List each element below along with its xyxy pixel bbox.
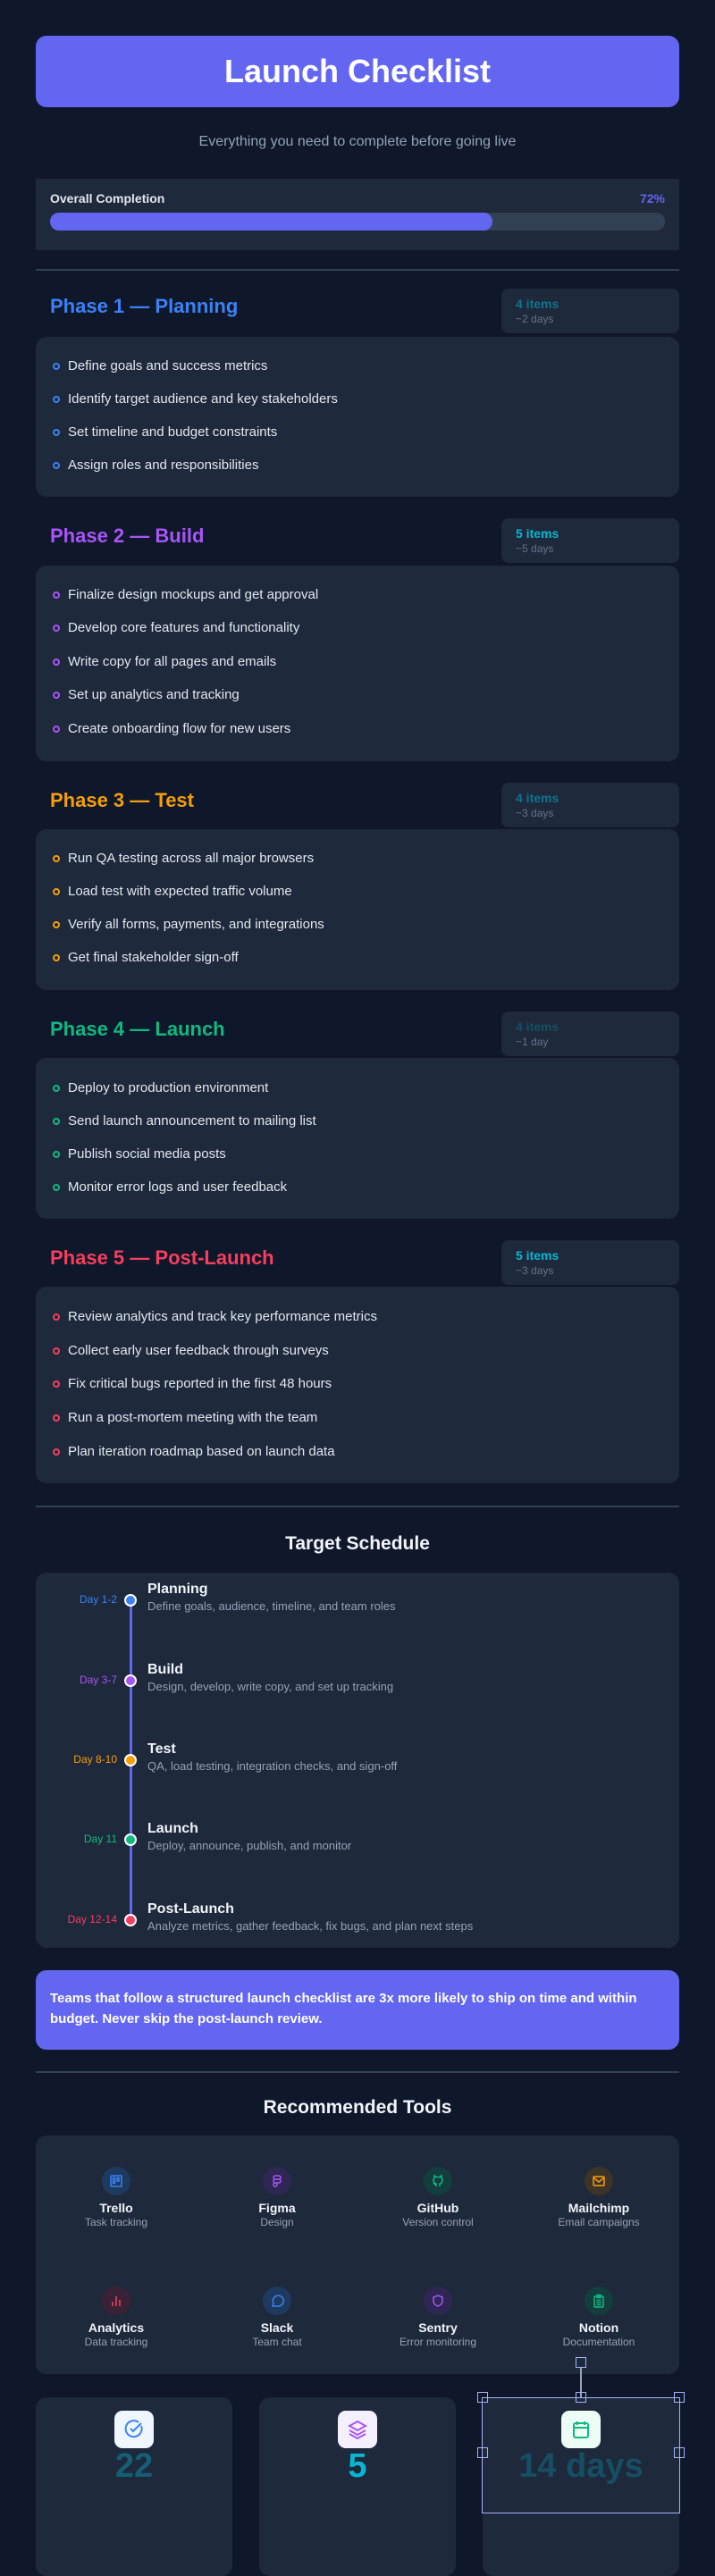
timeline: build: Day 3-7 — [80, 1674, 117, 1686]
progress value: 72% — [640, 191, 665, 206]
panel: phase 3 list — [36, 829, 679, 990]
panel: phase 2 list: Develop core features and functionality — [68, 620, 299, 635]
panel: timeline — [36, 1573, 679, 1948]
panel: phase 5 list: Run a post-mortem meeting with the team — [68, 1410, 317, 1425]
progress panel — [36, 179, 679, 250]
panel: timeline: Build — [147, 1662, 183, 1677]
tool: trello — [85, 2167, 147, 2228]
phase 5 badge: ~3 days — [516, 1264, 553, 1277]
timeline: planning: Day 1-2 — [80, 1593, 117, 1606]
tool: notion: Notion — [579, 2320, 618, 2335]
panel: phase 1 list — [36, 337, 679, 497]
tool: github: Version control — [402, 2216, 474, 2228]
phase 5 heading: Phase 5 — Post-Launch — [50, 1246, 274, 1269]
subtitle: Everything you need to complete before going live — [199, 134, 516, 149]
panel: phase 2 list: Write copy for all pages and emails — [68, 654, 276, 669]
panel: phase 3 list: Run QA testing across all major browsers — [68, 851, 314, 866]
timeline: build — [80, 1662, 393, 1693]
phase 1 badge — [501, 289, 679, 333]
tool: github — [402, 2167, 474, 2228]
tool: figma: Figma — [258, 2201, 296, 2215]
selection overlay — [477, 2357, 685, 2513]
tool: analytics: Analytics — [88, 2320, 144, 2335]
tool: github: GitHub — [417, 2201, 458, 2215]
panel: phase 4 list: Monitor error logs and user feedback — [68, 1179, 287, 1195]
panel: timeline: Deploy, announce, publish, and monitor — [147, 1839, 351, 1852]
tool: notion — [563, 2287, 635, 2348]
tool: notion: Documentation — [563, 2336, 635, 2348]
tool: analytics: Data tracking — [85, 2336, 147, 2348]
tool: slack — [252, 2287, 302, 2348]
panel: phase 2 list: Finalize design mockups and get approval — [68, 587, 318, 602]
panel: timeline: Planning — [147, 1582, 208, 1597]
phase 3 badge — [501, 783, 679, 827]
callout — [36, 1970, 679, 2050]
timeline: test: Day 8-10 — [73, 1753, 117, 1766]
tool: mailchimp — [558, 2167, 640, 2228]
panel: phase 1 list: Identify target audience and key stakeholders — [68, 391, 338, 407]
panel: phase 5 list: Fix critical bugs reported in the first 48 hours — [68, 1376, 332, 1391]
panel: timeline: QA, load testing, integration checks, and sign-off — [147, 1759, 397, 1773]
timeline line — [129, 1600, 132, 1920]
phase 1 heading: Phase 1 — Planning — [50, 295, 238, 317]
progress bar — [50, 213, 665, 231]
phase 2 badge: ~5 days — [516, 542, 553, 555]
heading: target schedule: Target Schedule — [285, 1533, 430, 1554]
panel: phase 3 list: Verify all forms, payments, and integrations — [68, 917, 324, 932]
icon: layers — [338, 2411, 377, 2448]
stat card: items: 22 — [115, 2447, 153, 2485]
timeline: launch: Day 11 — [84, 1833, 117, 1845]
icon: check — [114, 2411, 154, 2448]
icon: calendar — [561, 2411, 601, 2448]
panel: tools — [36, 2135, 679, 2374]
phase 5 badge: 5 items — [516, 1248, 559, 1263]
panel: timeline: Define goals, audience, timeline, and team roles — [147, 1599, 395, 1613]
timeline: post-launch — [68, 1901, 473, 1933]
panel: timeline: Analyze metrics, gather feedback, fix bugs, and plan next steps — [147, 1919, 473, 1933]
timeline: planning — [80, 1582, 395, 1613]
timeline: test — [73, 1741, 397, 1773]
tool: mailchimp: Email campaigns — [558, 2216, 640, 2228]
timeline: launch — [84, 1821, 351, 1852]
title banner — [36, 36, 679, 107]
panel: phase 4 list — [36, 1058, 679, 1219]
panel: timeline: Test — [147, 1741, 176, 1757]
tool: mailchimp: Mailchimp — [568, 2201, 629, 2215]
tool: sentry — [400, 2287, 476, 2348]
panel: phase 1 list: Assign roles and responsibilities — [68, 457, 258, 473]
panel: phase 2 list: Create onboarding flow for new users — [68, 721, 290, 736]
tool: analytics — [85, 2287, 147, 2348]
tool: sentry: Error monitoring — [400, 2336, 476, 2348]
panel: phase 4 list: Send launch announcement to mailing list — [68, 1113, 316, 1129]
progress label: Overall Completion — [50, 191, 164, 206]
panel: phase 5 list — [36, 1287, 679, 1483]
phase 2 badge: 5 items — [516, 526, 559, 541]
panel: phase 4 list: Publish social media posts — [68, 1146, 226, 1162]
phase 3 badge: ~3 days — [516, 807, 553, 819]
panel: phase 1 list: Define goals and success metrics — [68, 358, 267, 373]
phase 4 badge — [501, 1011, 679, 1056]
phase 4 badge: 4 items — [516, 1019, 559, 1034]
timeline: post-launch: Day 12-14 — [68, 1913, 117, 1926]
panel: phase 5 list: Collect early user feedback through surveys — [68, 1343, 329, 1358]
tool: sentry: Sentry — [418, 2320, 458, 2335]
stat card: phases: 5 — [348, 2447, 367, 2485]
panel: timeline: Design, develop, write copy, and set up tracking — [147, 1680, 393, 1693]
phase 2 heading: Phase 2 — Build — [50, 524, 204, 547]
phase 5 badge — [501, 1240, 679, 1285]
phase 4 badge: ~1 day — [516, 1036, 548, 1048]
phase 3 heading: Phase 3 — Test — [50, 789, 194, 811]
panel: phase 2 list — [36, 566, 679, 761]
title banner: Launch Checklist — [224, 53, 491, 89]
heading: recommended tools: Recommended Tools — [264, 2097, 451, 2118]
phase 3 badge: 4 items — [516, 791, 559, 805]
panel: timeline: Post-Launch — [147, 1901, 234, 1917]
panel: phase 5 list: Review analytics and track key performance metrics — [68, 1309, 377, 1324]
stat card: days — [483, 2397, 679, 2576]
tool: trello: Trello — [99, 2201, 133, 2215]
panel: timeline: Launch — [147, 1821, 198, 1836]
phase 4 heading: Phase 4 — Launch — [50, 1018, 225, 1040]
tool: slack: Team chat — [252, 2336, 302, 2348]
tool: trello: Task tracking — [85, 2216, 147, 2228]
panel: phase 4 list: Deploy to production environment — [68, 1080, 268, 1095]
panel: phase 5 list: Plan iteration roadmap based on launch data — [68, 1444, 335, 1459]
panel: phase 1 list: Set timeline and budget constraints — [68, 424, 277, 440]
tool: slack: Slack — [261, 2320, 293, 2335]
tool: figma: Design — [260, 2216, 294, 2228]
phase 2 badge — [501, 518, 679, 563]
panel: phase 3 list: Load test with expected traffic volume — [68, 884, 292, 899]
phase 1 badge: 4 items — [516, 297, 559, 311]
phase 1 badge: ~2 days — [516, 313, 553, 325]
stat card: items — [36, 2397, 232, 2576]
callout: Teams that follow a structured launch checklist are 3x more likely to ship on time and within budget. Never skip the post-launch review. — [50, 1991, 637, 2026]
panel: phase 3 list: Get final stakeholder sign-off — [68, 950, 239, 965]
panel: phase 2 list: Set up analytics and tracking — [68, 687, 240, 702]
tool: figma — [258, 2167, 296, 2228]
stat card: phases — [259, 2397, 456, 2576]
stat card: days: 14 days — [518, 2447, 644, 2485]
